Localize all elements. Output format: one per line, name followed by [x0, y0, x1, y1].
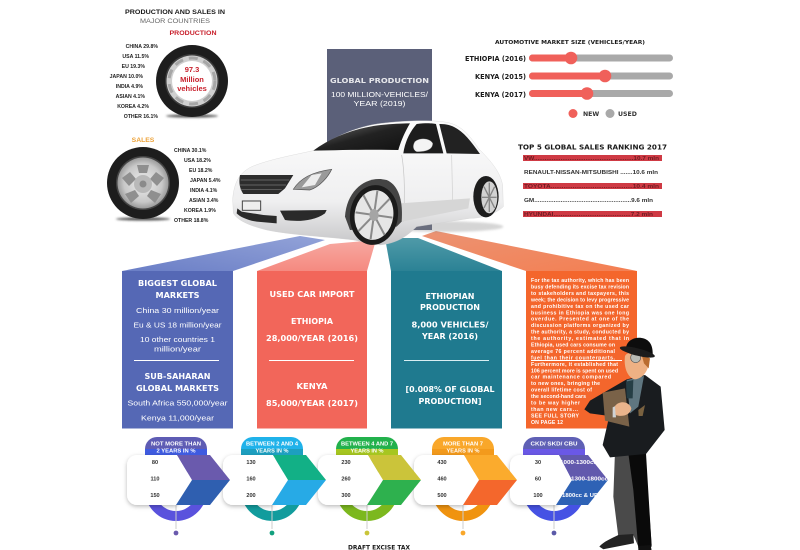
legend: new and used — [568, 109, 637, 118]
panel: ethiopian production: PRODUCTION] — [418, 397, 482, 406]
panel: tax article: to new ones, bringing the — [531, 381, 600, 387]
illustration: man with clipboard — [584, 338, 665, 550]
panel: biggest global markets: MARKETS — [156, 291, 200, 300]
panel: tax article — [526, 271, 637, 428]
unit: between 2 and 4 years: YEARS IN % — [256, 448, 289, 454]
panel: global production: GLOBAL PRODUCTION — [330, 77, 429, 85]
icon: production tyre: vehicles — [177, 84, 207, 93]
fan: blue — [122, 236, 325, 271]
panel: biggest global markets: SUB-SAHARAN — [144, 372, 210, 381]
sales country list: EU 18.2% — [189, 168, 213, 174]
panel: ethiopian production: PRODUCTION — [420, 303, 480, 312]
production label: PRODUCTION — [170, 30, 217, 37]
sales label: SALES — [132, 137, 155, 144]
panel: tax article: week; the decision to levy progressive — [530, 297, 629, 303]
panel: ethiopian production: 8,000 VEHICLES/ — [412, 320, 489, 330]
unit: not more than 2 years: 2 YEARS IN % — [156, 448, 196, 454]
panel: tax article: fuel than their counterparts. — [531, 355, 616, 361]
unit: not more than 2 years: NOT MORE THAN — [151, 442, 201, 448]
production country list: KOREA 4.2% — [117, 104, 149, 110]
production country list: USA 11.5% — [122, 54, 149, 60]
heading: market size: AUTOMOTIVE MARKET SIZE (VEHICLES/YEAR) — [495, 40, 645, 46]
unit: ckd skd cbu — [510, 437, 608, 535]
unit: not more than 2 years: 110 — [150, 476, 160, 482]
unit: more than 7 years: YEARS IN % — [446, 448, 480, 454]
fan: teal — [385, 238, 502, 271]
panel: tax article: and prohibitive tax on the used car — [531, 304, 629, 310]
chart: market size sliders — [465, 52, 673, 100]
unit: ckd skd cbu: 1800cc & UP — [562, 493, 599, 499]
sales country list: USA 18.2% — [184, 158, 211, 164]
panel: tax article: average 76 percent additional — [531, 349, 616, 355]
panel: biggest global markets: Eu & US 18 million/year — [134, 322, 222, 330]
production country list — [110, 44, 158, 120]
panel: ethiopian production — [391, 271, 502, 428]
panel: biggest global markets: China 30 million/year — [136, 308, 220, 315]
unit: between 4 and 7 years: 230 — [341, 460, 351, 466]
unit: more than 7 years: 460 — [437, 476, 447, 482]
panel: global production: YEAR (2019) — [354, 99, 406, 108]
icon: production tyre — [156, 45, 228, 118]
table: top 5 ranking: RENAULT-NISSAN-MITSUBISHI .......10.6 mln — [524, 170, 658, 176]
panel: tax article: than new cars... — [531, 407, 579, 413]
panel: global production — [327, 49, 432, 230]
panel: biggest global markets — [122, 271, 233, 428]
production country list: CHINA 29.8% — [126, 44, 158, 50]
heading: production and sales: PRODUCTION AND SALES IN — [125, 9, 225, 16]
sales country list: INDIA 4.1% — [190, 188, 218, 194]
panel: tax article: For the tax authority, which has been — [531, 278, 629, 284]
unit: ckd skd cbu: 30 — [535, 460, 541, 466]
unit: ckd skd cbu: 1000-1300cc — [560, 460, 597, 466]
icon: sales tyre — [107, 147, 179, 221]
unit: between 4 and 7 years: 260 — [341, 476, 351, 482]
unit: between 2 and 4 years: 200 — [246, 493, 256, 499]
panel: biggest global markets: GLOBAL MARKETS — [136, 384, 219, 393]
panel: tax article: SEE FULL STORY — [531, 413, 580, 419]
panel: global production: 100 MILLION-VEHICLES/ — [331, 90, 429, 99]
unit: between 2 and 4 years: BETWEEN 2 AND 4 — [246, 442, 299, 448]
panel: tax article: overall lifetime cost of — [531, 388, 592, 394]
panel: biggest global markets: 10 other countries 1 — [140, 337, 215, 344]
unit: not more than 2 years: 80 — [152, 460, 158, 466]
production country list: EU 19.3% — [122, 64, 145, 70]
chart: market size sliders: KENYA (2017) — [475, 91, 526, 99]
unit: not more than 2 years: 150 — [150, 493, 160, 499]
sales country list: OTHER 18.8% — [174, 218, 209, 224]
panel: biggest global markets: Kenya 11,000/year — [141, 416, 215, 422]
unit: more than 7 years: MORE THAN 7 — [443, 442, 483, 448]
table: top 5 ranking: HYUNDAI...........................................7.2 mln — [524, 212, 653, 218]
heading: top 5 sales ranking: TOP 5 GLOBAL SALES RANKING 2017 — [518, 142, 667, 152]
unit: between 4 and 7 years: 300 — [341, 493, 351, 499]
panel: used car import: USED CAR IMPORT — [270, 290, 355, 299]
panel: tax article: 106 percent more is spent on used — [531, 368, 618, 374]
unit: ckd skd cbu: 1300-1800cc — [571, 476, 608, 482]
panel: tax article: overdue. Presented at one of the — [531, 317, 629, 323]
production country list: INDIA 4.9% — [116, 84, 143, 90]
panel: used car import: 85,000/YEAR (2017) — [266, 399, 358, 408]
legend: new and used: NEW — [583, 111, 599, 118]
unit: between 4 and 7 years: BETWEEN 4 AND 7 — [341, 442, 393, 448]
table: top 5 ranking: VW........................................................10.7 mln — [524, 156, 659, 162]
fan: orange — [422, 231, 637, 271]
panel: biggest global markets: million/year — [154, 346, 202, 354]
unit: not more than 2 years — [127, 437, 230, 535]
icon: production tyre: 97.3 — [185, 65, 199, 74]
sales country list: ASIAN 3.4% — [189, 198, 219, 204]
panel: tax article: the second-hand cars — [531, 394, 586, 400]
icon: production tyre: Million — [180, 75, 204, 84]
panel: tax article: business in Ethiopia was one long — [531, 310, 629, 316]
panel: tax article: discussion platforms organized by — [531, 323, 629, 329]
unit: between 2 and 4 years — [223, 437, 326, 535]
sales country list — [174, 148, 221, 224]
production country list: OTHER 16.1% — [124, 114, 158, 120]
unit: more than 7 years: 500 — [437, 493, 447, 499]
fan: red — [257, 240, 376, 271]
chart: market size sliders: KENYA (2015) — [475, 73, 526, 81]
sales country list: JAPAN 5.4% — [190, 178, 221, 184]
panel: tax article: the authority, a study, conducted by — [531, 330, 629, 336]
panel: used car import — [257, 271, 367, 428]
unit: between 4 and 7 years: YEARS IN % — [350, 448, 384, 454]
panel: biggest global markets: BIGGEST GLOBAL — [138, 279, 217, 288]
panel: tax article: to stakeholders and taxpayers, this — [531, 291, 629, 297]
unit: between 2 and 4 years: 160 — [246, 476, 256, 482]
panel: used car import: ETHIOPIA — [291, 317, 333, 326]
unit: ckd skd cbu: CKD/ SKD/ CBU — [530, 442, 578, 448]
panel: used car import: KENYA — [296, 382, 328, 391]
panel: tax article: ON PAGE 12 — [531, 420, 563, 426]
unit: more than 7 years — [414, 437, 517, 535]
unit: between 4 and 7 years — [318, 437, 421, 535]
panel: tax article: Ethiopia, used cars consume on — [531, 342, 615, 348]
unit: ckd skd cbu: 60 — [535, 476, 541, 482]
production country list: JAPAN 10.0% — [110, 74, 143, 80]
panel: biggest global markets: South Africa 550,000/year — [128, 400, 228, 408]
table: top 5 ranking: TOYOTA.............................................10.4 mln — [524, 184, 659, 190]
panel: tax article: the authority, estimated that in — [531, 336, 629, 342]
unit: between 2 and 4 years: 130 — [246, 460, 256, 466]
sales country list: KOREA 1.9% — [184, 208, 216, 214]
panel: ethiopian production: ETHIOPIAN — [426, 292, 474, 301]
panel: tax article: car maintenance compared — [531, 375, 611, 381]
table: top 5 ranking — [523, 155, 662, 218]
sales country list: CHINA 30.1% — [174, 148, 207, 154]
heading: production and sales — [125, 9, 225, 25]
heading: production and sales: MAJOR COUNTRIES — [140, 18, 210, 25]
panel: used car import: 28,000/YEAR (2016) — [266, 334, 358, 343]
panel: tax article: busy defending its excise tax revision — [531, 284, 629, 290]
table: top 5 ranking: GM.......................................................9.6 mln — [524, 198, 653, 204]
legend: new and used: USED — [618, 111, 637, 118]
production country list: ASIAN 4.1% — [116, 94, 145, 100]
unit: more than 7 years: 430 — [437, 460, 447, 466]
panel: tax article: to be way higher — [531, 400, 580, 406]
unit: ckd skd cbu: 100 — [533, 493, 543, 499]
panel: ethiopian production: [0.008% OF GLOBAL — [406, 385, 495, 394]
chart: market size sliders: ETHIOPIA (2016) — [465, 55, 526, 63]
panel: ethiopian production: YEAR (2016) — [421, 332, 478, 341]
panel: tax article: Furthermore, it established that — [531, 362, 618, 368]
car — [233, 121, 503, 248]
